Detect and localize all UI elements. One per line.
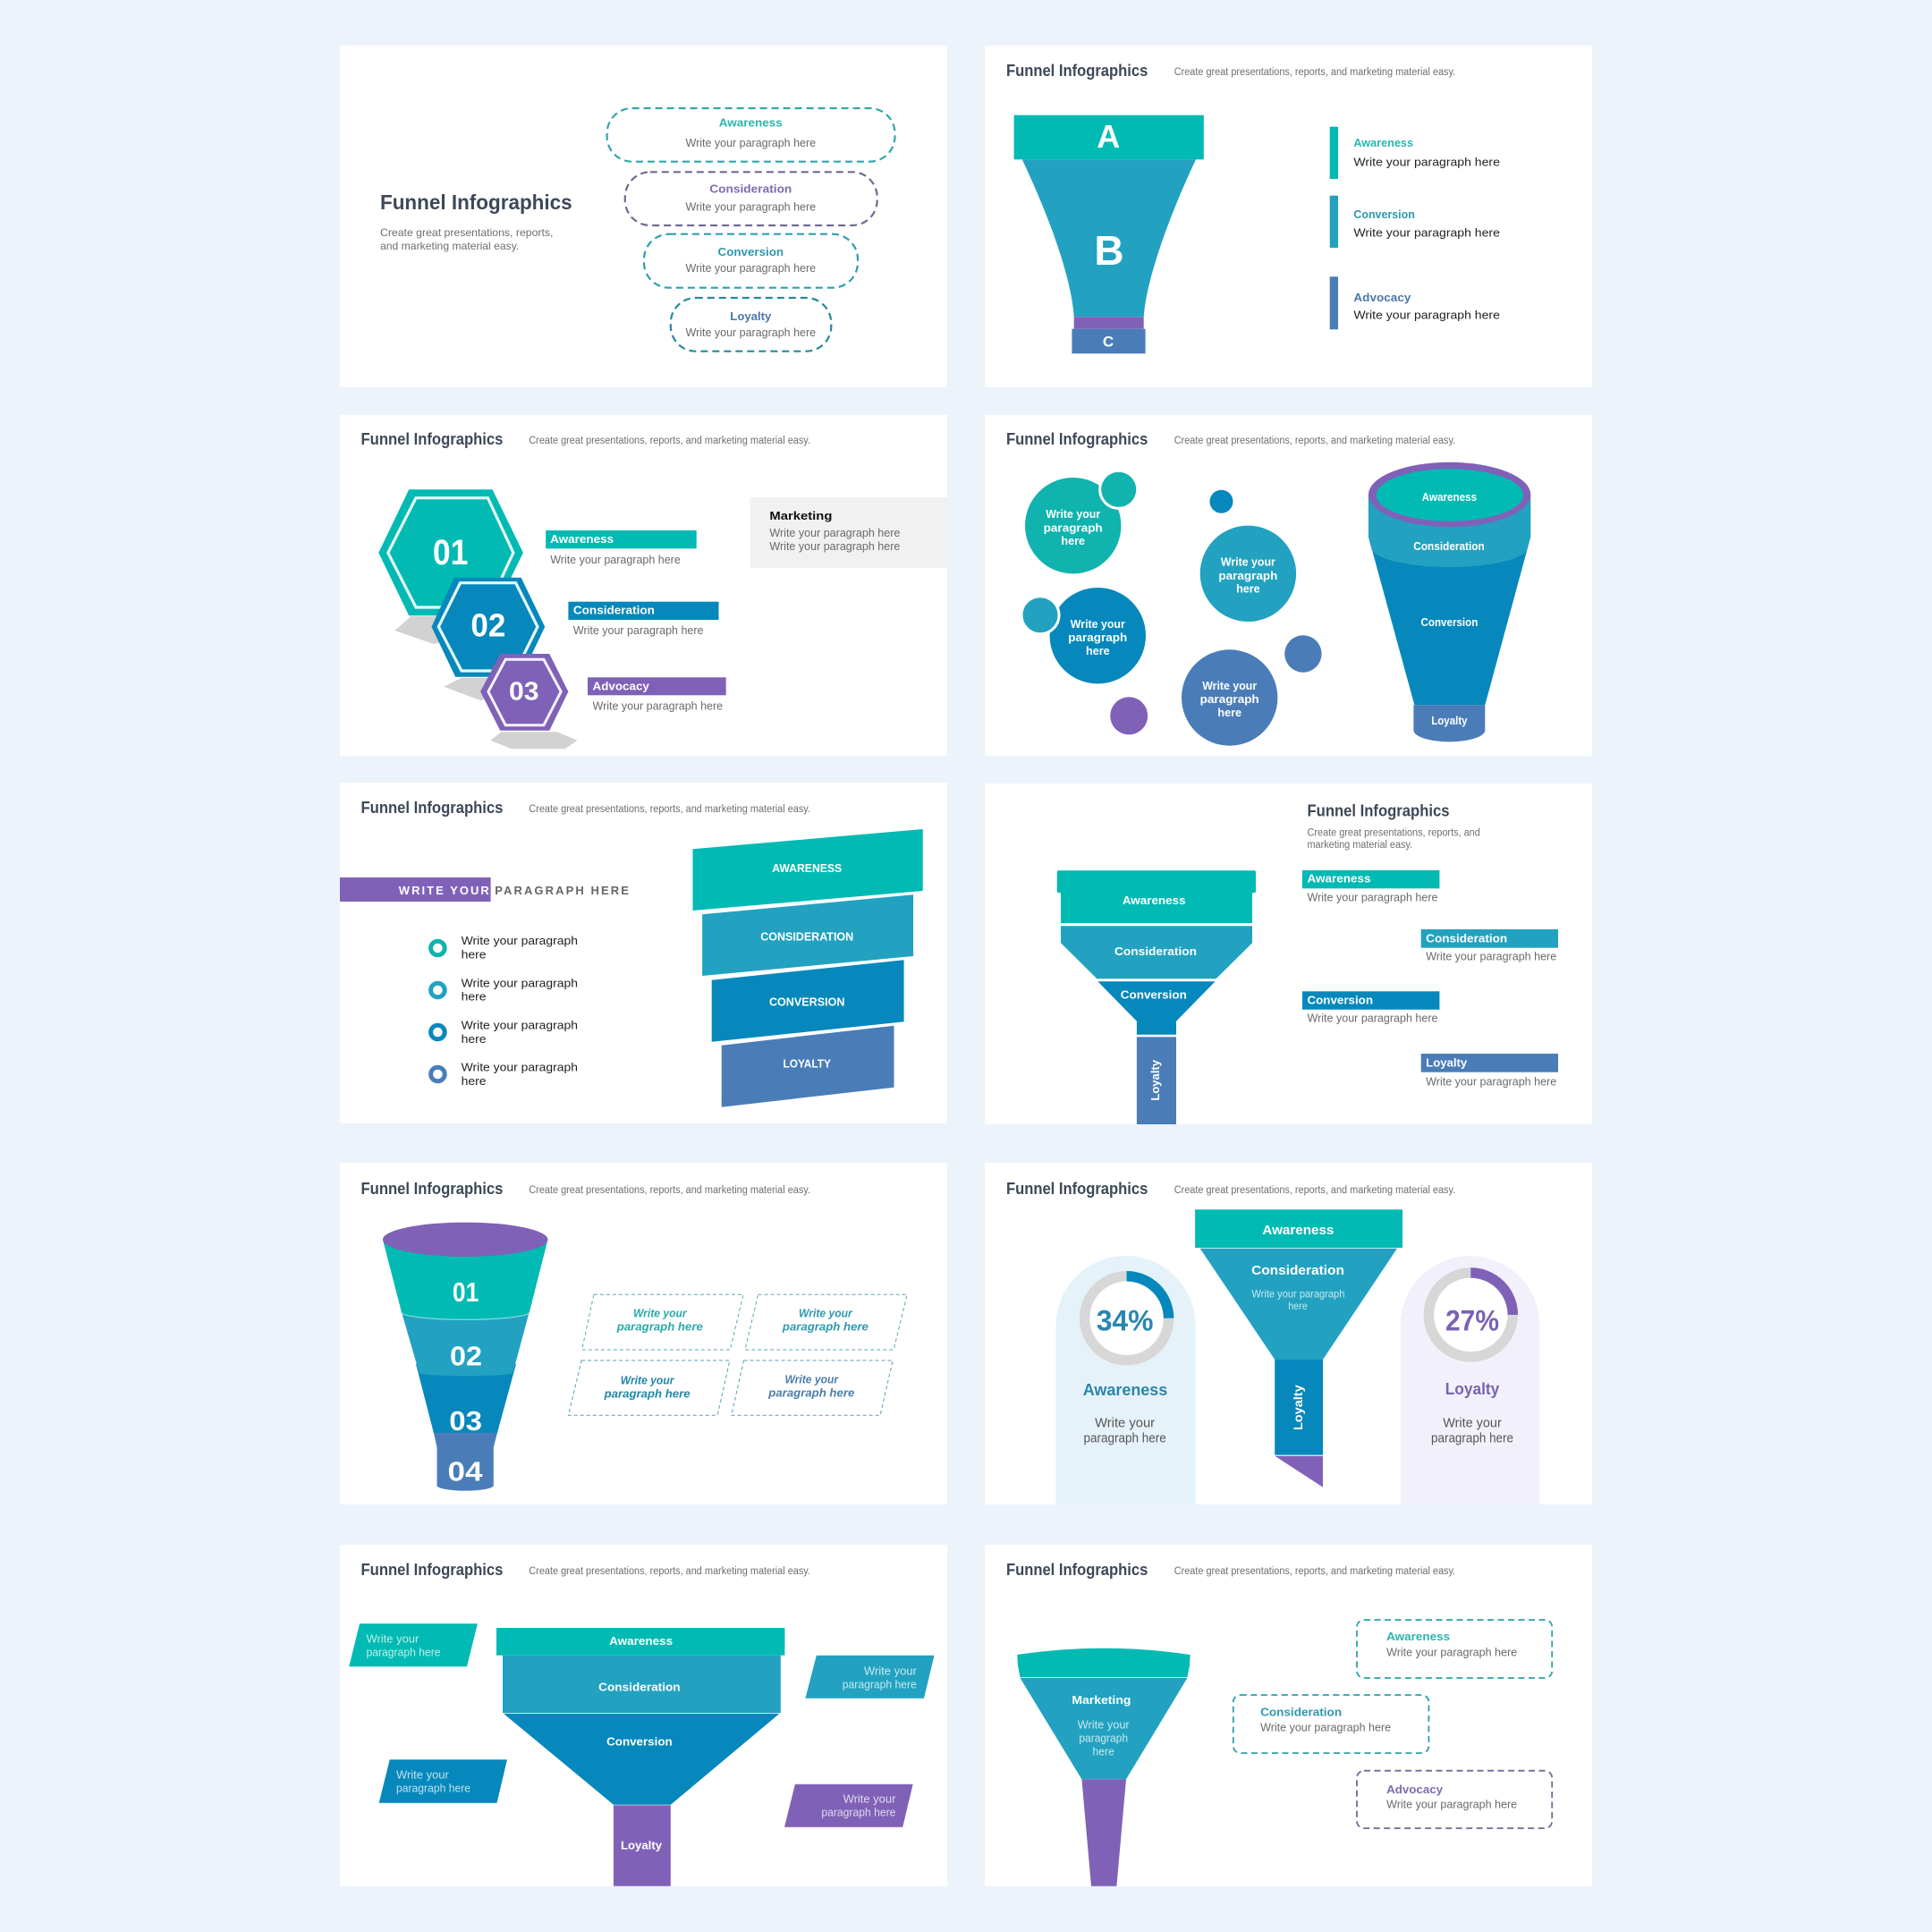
card: awareness 34%: paragraph here [1083,1430,1166,1445]
heading: Funnel Infographics [1308,801,1449,819]
list item 1 [431,934,578,962]
funnel: rim [1017,1648,1191,1677]
step: loyalty: LOYALTY [784,1056,831,1070]
box: awareness: Awareness [1386,1630,1450,1643]
item: awareness: Write your paragraph here [1353,156,1500,169]
bubble 4: here [1217,706,1241,719]
hexagon 02: 02 [470,607,505,644]
bubble 4 [1182,649,1277,746]
funnel: section B: B [1094,227,1124,274]
item: advocacy [1330,276,1500,329]
panel: marketing funnel with dashed boxes [985,1545,1592,1886]
dashed box 1: paragraph here [616,1319,703,1333]
small purple bubble [1110,697,1148,734]
dashed box 4: Write your [784,1373,839,1386]
panel: funnel with percent rings [985,1163,1592,1504]
pill: conversion: Conversion [718,245,784,258]
step: awareness: AWARENESS [772,861,843,875]
step: consideration [702,894,913,976]
bubble 2: paragraph [1218,569,1277,582]
heading: Funnel Infographics [361,1180,503,1198]
pill: conversion [644,234,858,288]
funnel: neck band [1074,317,1144,329]
heading: Funnel Infographics [361,799,503,817]
list item 3: here [462,1032,487,1046]
item: advocacy: Advocacy [1353,291,1411,304]
box: consideration [1233,1695,1428,1753]
step: awareness [692,829,923,911]
note: purple: Write your [843,1793,895,1806]
cup funnel: Loyalty [1431,715,1468,727]
funnel: loyalty stem: Loyalty [1291,1385,1305,1430]
note: blue [379,1759,507,1803]
hexagon 01 [378,489,523,615]
step: conversion [712,960,904,1042]
item: conversion [1330,196,1500,248]
panel: hexagons [340,415,947,756]
box: advocacy: Write your paragraph here [1386,1799,1517,1811]
dashed box 2 [745,1294,907,1350]
step: loyalty [722,1026,894,1107]
bubble 3: paragraph [1068,631,1127,644]
list item 3: Write your paragraph [462,1019,578,1032]
step: consideration: CONSIDERATION [760,930,853,944]
note: blue: paragraph here [396,1782,470,1794]
marketing callout: Marketing [769,509,832,522]
note: teal: paragraph here [367,1647,441,1659]
note: light blue [805,1656,934,1699]
bubble 2: Write your [1221,555,1275,569]
note: light blue: paragraph here [843,1678,917,1690]
panel: numbered cone funnel [340,1163,947,1504]
tag: conversion [1302,991,1439,1024]
list item 1: Write your paragraph [462,934,578,947]
subheading: Create great presentations, reports, and marketing material easy. [529,436,810,446]
cup funnel: Conversion [1420,616,1478,629]
funnel: consideration: Consideration [1114,945,1197,958]
pill: awareness: Write your paragraph here [685,137,816,149]
funnel: consideration: Consideration [1251,1263,1344,1278]
dashed box 4: paragraph here [767,1386,854,1400]
list item 2: Write your paragraph [462,976,578,989]
note: blue: Write your [396,1768,449,1781]
tag: conversion: Conversion [1308,993,1373,1006]
tag: consideration [1421,929,1558,962]
dashed box 1: Write your [633,1306,688,1319]
subheading: Create great presentations, reports, and marketing material easy. [529,804,810,815]
note: teal: Write your [367,1633,419,1646]
pill: awareness: Awareness [719,116,783,130]
cone funnel: 04 [447,1456,483,1487]
pill: loyalty: Loyalty [730,309,772,323]
funnel: marketing [1020,1678,1187,1779]
subheading: Create great presentations, reports, and marketing material easy. [529,1185,810,1196]
funnel: section C [1072,329,1146,353]
item: awareness: Awareness [1353,136,1413,149]
tag: awareness [1302,870,1439,903]
funnel: section B [1022,159,1196,317]
funnel: consideration [503,1656,781,1713]
funnel: loyalty: Loyalty [1148,1059,1162,1101]
subheading: Create great presentations, reports, and marketing material easy. [1174,1185,1455,1196]
funnel: loyalty: Loyalty [621,1839,663,1852]
list item 2 [431,976,578,1004]
box: consideration: Consideration [1260,1705,1342,1718]
box: awareness: Write your paragraph here [1386,1647,1517,1659]
heading: Funnel Infographics [1006,430,1148,448]
label: consideration [568,602,719,637]
funnel: consideration [1200,1249,1397,1360]
title: Funnel Infographics [380,191,572,214]
bubble 4: paragraph [1200,692,1259,706]
panel: dashed pill funnel [340,46,947,387]
funnel: awareness: Awareness [1262,1223,1334,1238]
tag: consideration: Consideration [1426,931,1507,945]
funnel: conversion [504,1714,780,1805]
subtitle: Create great presentations, reports, [380,226,553,239]
step: conversion: CONVERSION [769,995,844,1008]
list item 3 [431,1019,578,1046]
tag: loyalty: Loyalty [1426,1055,1468,1069]
box: advocacy: Advocacy [1386,1783,1444,1796]
pill: consideration [625,172,877,225]
funnel: purple tip [1275,1456,1323,1487]
note: purple [784,1784,913,1827]
bubble 3 [1021,588,1146,683]
tag: awareness: Awareness [1308,872,1370,886]
card: loyalty 27%: paragraph here [1431,1430,1513,1445]
funnel: awareness [1195,1209,1402,1248]
bubble 1: paragraph [1044,521,1103,534]
funnel: conversion: Conversion [1121,988,1187,1002]
card: loyalty 27%: Write your [1443,1416,1502,1431]
dashed box 3: paragraph here [604,1386,691,1400]
funnel: stem [1081,1779,1126,1886]
shadows under hexagons [394,616,578,749]
cone funnel: 01 [453,1276,479,1308]
dashed box 4 [732,1360,893,1415]
bubble 1: Write your [1046,507,1100,521]
cup funnel: Awareness [1422,491,1477,504]
pill: conversion: Write your paragraph here [685,262,816,275]
funnel: marketing: here [1093,1745,1114,1758]
card: awareness 34% [1055,1256,1196,1504]
hexagon 01: 01 [433,533,468,572]
dashed box 2: Write your [799,1306,853,1319]
tag: loyalty: Write your paragraph here [1426,1076,1556,1089]
bubble 4: Write your [1202,679,1257,692]
subtitle: and marketing material easy. [380,240,519,252]
banner: WRITE YOUR [399,884,489,897]
subheading: Create great presentations, reports, and marketing material easy. [1174,1566,1455,1577]
tag: awareness: Write your paragraph here [1308,891,1438,903]
cone funnel: 03 [449,1405,482,1436]
label: advocacy [588,677,726,712]
bubble 2: here [1236,582,1260,596]
subheading [1308,827,1480,851]
item: conversion: Conversion [1353,208,1415,221]
funnel: section C: C [1103,333,1114,351]
funnel: marketing: paragraph [1079,1732,1128,1744]
funnel: conversion: Conversion [606,1735,673,1749]
label: advocacy: Write your paragraph here [592,699,723,712]
heading: Funnel Infographics [1006,1561,1148,1579]
subheading: Create great presentations, reports, and [1308,827,1480,838]
note: teal [349,1623,478,1666]
subtitle [380,226,553,252]
heading: Funnel Infographics [361,1561,503,1579]
funnel: loyalty [614,1805,671,1886]
dashed box 1 [582,1294,743,1350]
marketing callout [750,497,947,568]
panel: bubbles and cup funnel [985,415,1592,756]
list item 4 [431,1061,578,1088]
funnel: consideration: Consideration [598,1681,681,1694]
funnel: section A [1014,115,1204,159]
bubble 1: here [1061,534,1085,547]
label: awareness [546,530,697,566]
subheading: Create great presentations, reports, and marketing material easy. [1174,67,1455,78]
bubble 3: here [1086,644,1110,657]
marketing callout: Write your paragraph here [769,527,900,539]
panel: ABC funnel [985,46,1592,387]
label: consideration: Write your paragraph here [573,624,704,637]
heading: Funnel Infographics [1006,1180,1148,1198]
cup funnel [1368,462,1530,741]
item: advocacy: Write your paragraph here [1353,309,1500,322]
card: awareness 34%: Awareness [1083,1381,1167,1399]
funnel: loyalty [1137,1037,1176,1124]
panel: stacked funnel with tags [985,784,1592,1124]
funnel: consideration: here [1288,1300,1308,1312]
cone funnel [383,1223,547,1491]
note: purple: paragraph here [821,1807,895,1819]
hexagon 03: 03 [509,677,539,706]
list item 1: here [462,948,487,962]
label: advocacy: Advocacy [592,680,650,693]
funnel: section A: A [1097,118,1120,155]
pill: loyalty [671,298,831,352]
card: awareness 34%: Write your [1095,1416,1155,1431]
cone funnel: 02 [450,1341,482,1372]
tag: conversion: Write your paragraph here [1308,1012,1438,1024]
card: loyalty 27% [1401,1256,1539,1504]
list item 4: Write your paragraph [462,1061,578,1074]
banner [340,877,629,902]
bubble 3: Write your [1071,617,1125,631]
list item 4: here [462,1074,487,1088]
banner: PARAGRAPH HERE [495,884,629,897]
small blue bubble [1209,490,1233,513]
funnel: consideration: Write your paragraph [1251,1288,1344,1301]
funnel: consideration [1061,926,1252,979]
funnel: conversion [1097,981,1216,1035]
panel: funnel with parallelogram notes [340,1545,947,1886]
list item 2: here [462,990,487,1004]
pill: consideration: Write your paragraph here [685,201,816,214]
dashed box 2: paragraph here [782,1319,869,1333]
subheading: marketing material easy. [1308,840,1412,851]
small steel bubble [1284,635,1322,673]
box: consideration: Write your paragraph here [1260,1722,1391,1734]
bubble 2 [1200,526,1296,622]
label: consideration: Consideration [573,604,655,617]
pill: loyalty: Write your paragraph here [685,326,816,339]
hexagon 02 [431,578,545,677]
card: awareness 34%: 34% [1097,1305,1154,1337]
label: awareness: Awareness [550,532,614,546]
heading: Funnel Infographics [1006,62,1148,80]
pill: awareness [607,108,894,162]
item: conversion: Write your paragraph here [1353,226,1500,240]
marketing callout: Write your paragraph here [769,540,900,553]
pill: consideration: Consideration [709,182,792,195]
heading: Funnel Infographics [361,430,503,448]
subheading: Create great presentations, reports, and marketing material easy. [529,1566,810,1577]
dashed box 3 [568,1360,730,1415]
funnel: marketing: Marketing [1072,1693,1131,1707]
panel: slanted steps [340,783,947,1123]
label: awareness: Write your paragraph here [550,554,681,566]
card: loyalty 27%: 27% [1445,1305,1499,1337]
funnel: awareness [496,1628,784,1656]
subheading: Create great presentations, reports, and marketing material easy. [1174,436,1455,446]
funnel: loyalty stem [1275,1360,1323,1455]
funnel: awareness: Awareness [1123,894,1186,907]
tag: loyalty [1421,1054,1558,1089]
cup funnel: Consideration [1413,540,1485,553]
card: loyalty 27%: Loyalty [1445,1380,1499,1398]
dashed box 3: Write your [621,1373,674,1386]
hexagon 03 [480,654,568,731]
funnel: awareness [1057,870,1256,923]
funnel: awareness: Awareness [609,1634,673,1648]
tag: consideration: Write your paragraph here [1426,950,1556,962]
note: light blue: Write your [864,1665,917,1677]
box: advocacy [1357,1771,1552,1828]
box: awareness [1357,1620,1552,1678]
funnel: marketing: Write your [1078,1718,1130,1731]
bubble 1 [1025,470,1138,573]
item: awareness [1330,127,1500,179]
